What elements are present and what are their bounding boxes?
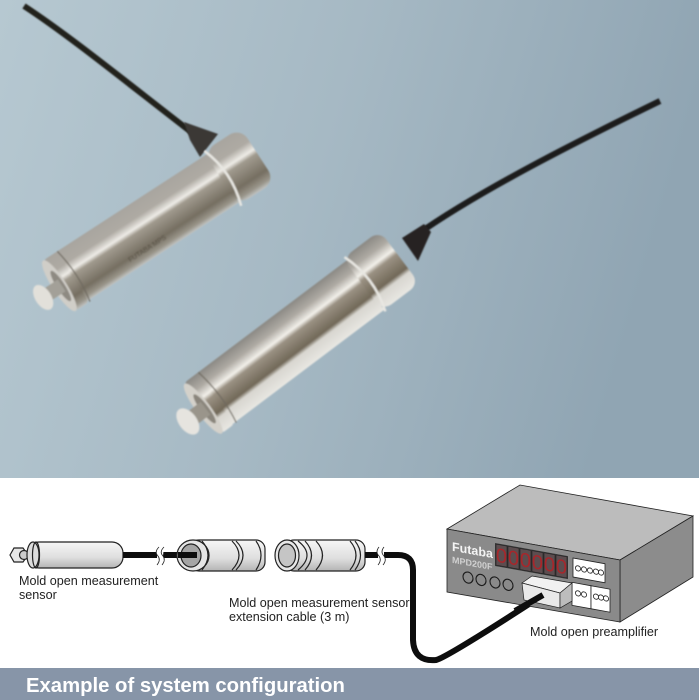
label: sensor: sensor <box>19 588 57 602</box>
label: sensor: Mold open measurement <box>19 574 159 588</box>
icon: cable with break marks <box>156 547 543 660</box>
LED display: 0 <box>496 545 507 569</box>
label: extension cable: extension cable (3 m) <box>229 610 349 624</box>
icon: left sensor <box>17 128 276 328</box>
icon: right sensor <box>158 231 421 452</box>
icon: sensor cable, right <box>415 101 660 236</box>
LED display: 0 <box>544 553 555 577</box>
title band <box>0 668 699 700</box>
LED display <box>495 543 568 580</box>
LED display: 0 <box>508 547 519 571</box>
icon: mold open preamplifier <box>447 485 693 622</box>
icon: extension cable connector, sensor end <box>163 540 265 571</box>
icon: left sensor: FUTABA MPS <box>127 234 168 264</box>
terminals <box>572 558 610 612</box>
model label: MPD200F <box>452 555 493 572</box>
connector plug <box>522 576 572 608</box>
LED display: 0 <box>520 549 531 573</box>
icon: extension cable connector, cable end <box>275 540 365 571</box>
label: extension cable: Mold open measurement sensor <box>229 596 410 610</box>
brand label: Futaba <box>452 540 494 561</box>
panel: product photo <box>0 0 699 478</box>
panel: system configuration diagram <box>0 478 699 668</box>
icon: measurement sensor <box>10 542 157 568</box>
icon: sensor cable, upper left <box>24 6 195 135</box>
LED display: 0 <box>532 551 543 575</box>
label: preamplifier: Mold open preamplifier <box>530 625 658 639</box>
buttons <box>463 571 513 591</box>
LED display: 0 <box>556 556 567 579</box>
icon: cable strain relief, left sensor <box>184 122 218 157</box>
title: Example of system configuration <box>26 675 345 697</box>
cable entering plug <box>515 595 543 611</box>
icon: cable strain relief, right sensor <box>402 224 431 261</box>
